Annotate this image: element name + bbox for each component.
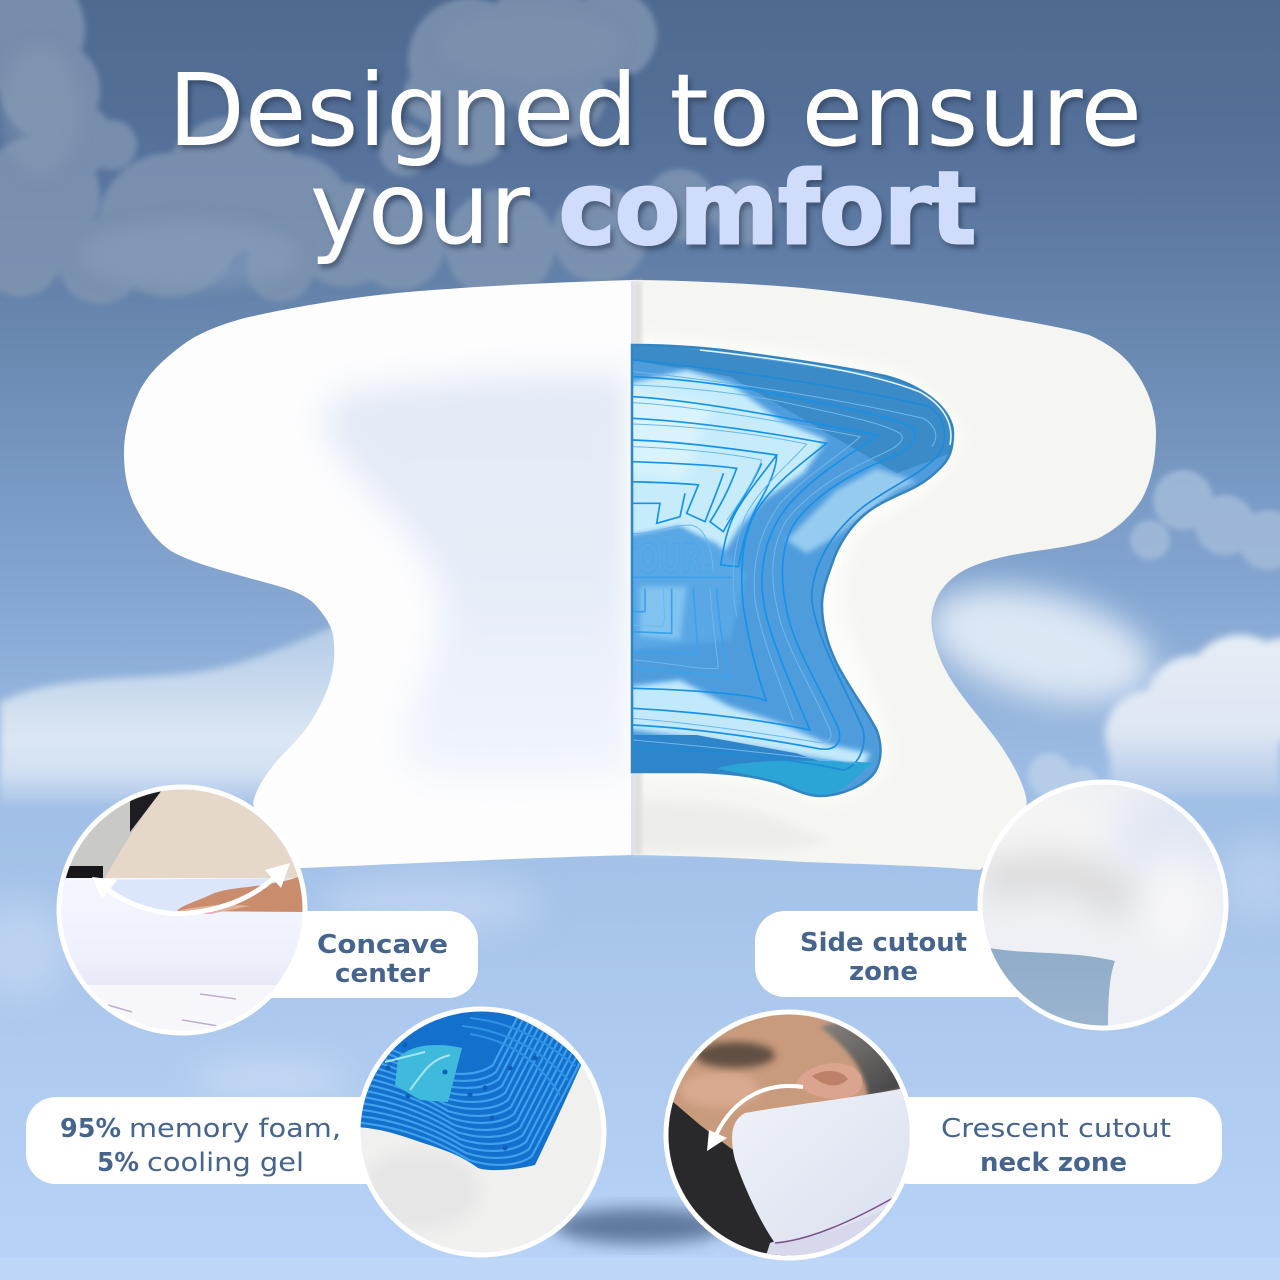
title line 1: Designed to ensure — [168, 52, 1142, 169]
callout: concave center — [50, 780, 478, 1040]
bed surface — [766, 1200, 890, 1256]
label text — [60, 1114, 341, 1178]
label text — [317, 930, 448, 989]
circle photo: gel closeup — [300, 950, 607, 1259]
pillow — [124, 280, 1156, 870]
gel contour lines — [633, 360, 945, 770]
label text: memory foam, — [129, 1114, 341, 1144]
label pill — [755, 911, 1045, 997]
label text: Crescent cutout — [941, 1114, 1171, 1144]
label text — [941, 1114, 1171, 1178]
label text: cooling gel — [147, 1148, 304, 1178]
label pill — [880, 1097, 1222, 1184]
hair — [820, 1022, 901, 1095]
label pill — [220, 911, 478, 998]
label text — [800, 928, 967, 987]
title word: your: your — [310, 150, 531, 267]
gel molded logo: TOUR. — [618, 537, 713, 583]
pillow left half: fabric cover — [124, 280, 633, 868]
label text: 5% — [97, 1148, 139, 1178]
callout: crescent cutout neck zone — [662, 1008, 1222, 1262]
beard shading — [695, 1042, 775, 1068]
pillow cast shadow — [554, 1208, 726, 1244]
callout: memory foam and cooling gel — [26, 1006, 606, 1258]
icon: curved double arrow — [92, 863, 290, 914]
label text: Side cutout — [800, 928, 967, 958]
label text: neck zone — [980, 1148, 1127, 1178]
label text: zone — [849, 957, 918, 987]
circle photo: pillow side cutout — [970, 778, 1231, 1035]
label text: Concave — [317, 930, 448, 960]
shirt — [668, 1102, 787, 1256]
title word: comfort: comfort — [559, 150, 976, 267]
title — [168, 52, 1142, 267]
pillow — [732, 1088, 920, 1243]
icon: curved arrow to neck — [707, 1086, 803, 1151]
label text: 95% — [60, 1114, 121, 1144]
circle photo: man resting on pillow — [662, 1008, 920, 1262]
label text: center — [335, 959, 430, 989]
pillow right half: memory foam — [631, 280, 1156, 870]
gel reflections — [630, 340, 960, 802]
circle photo: hand pressing pillow — [56, 784, 308, 1036]
callout: side cutout zone — [755, 778, 1231, 1035]
label pill — [26, 1097, 396, 1184]
ear — [796, 1063, 862, 1099]
cooling gel insert — [618, 340, 960, 802]
